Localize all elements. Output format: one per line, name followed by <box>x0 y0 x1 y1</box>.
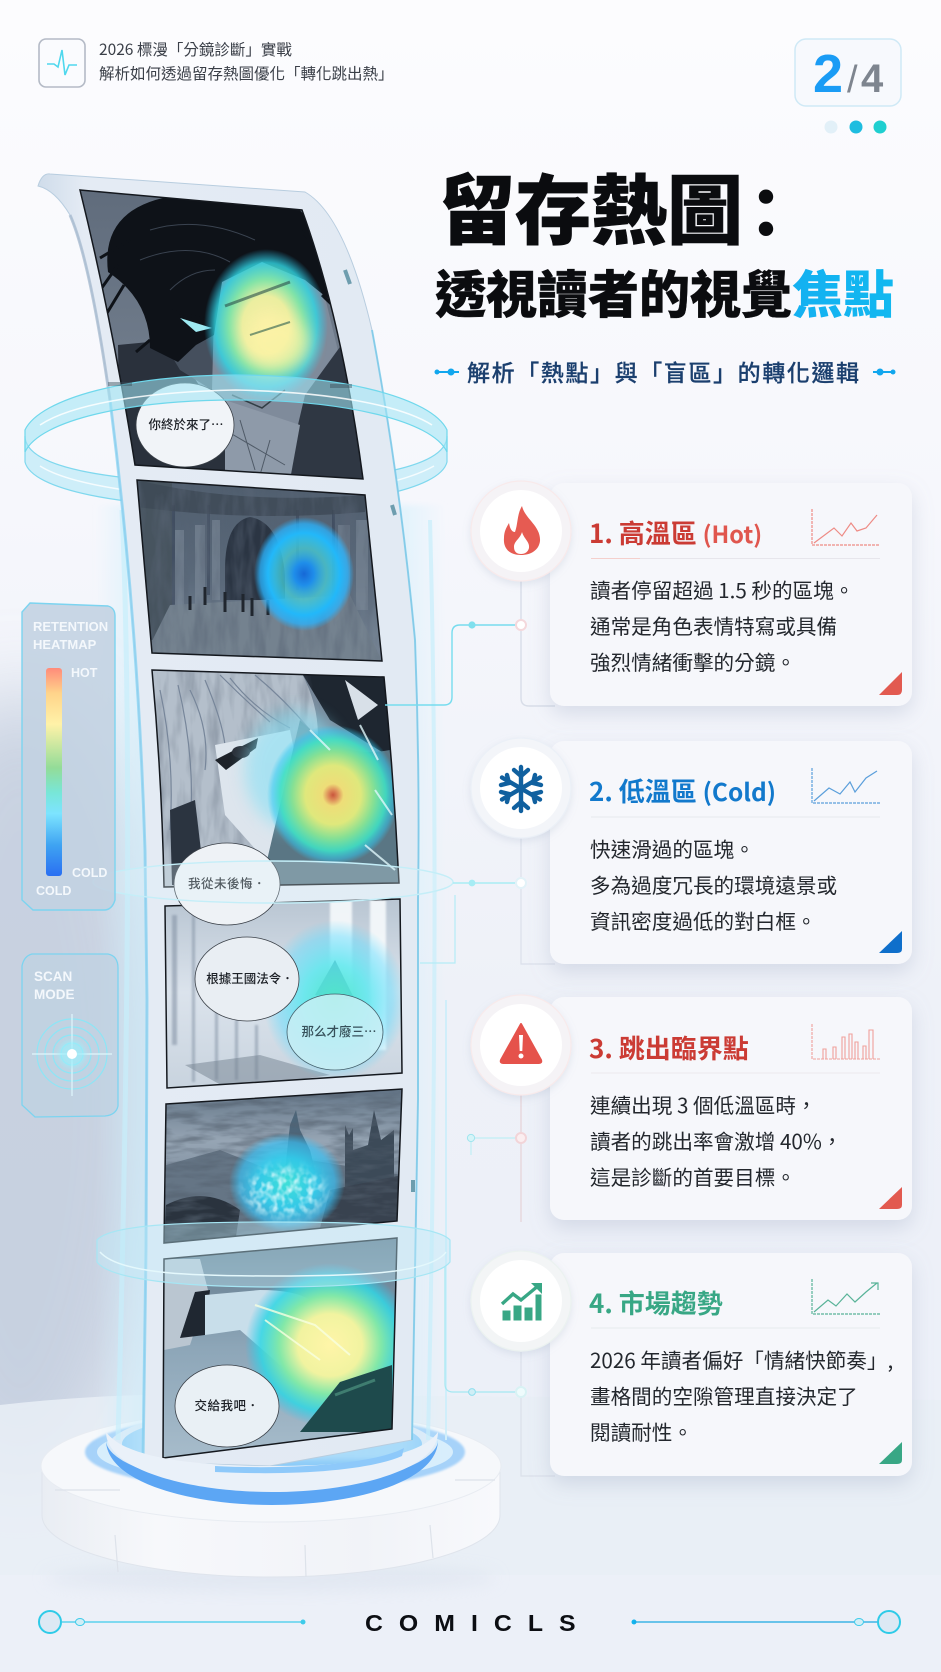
footer left decoration <box>39 1611 306 1633</box>
page dots <box>824 120 886 134</box>
icon: growth chart <box>471 1251 571 1351</box>
panel 5 border <box>164 1089 402 1243</box>
connector: card 3 <box>467 1095 526 1222</box>
icon: warning triangle <box>471 995 571 1095</box>
panel 4: pale waterfall with two bubbles <box>160 895 407 1090</box>
card 1: hot zone: 1. 高溫區 (Hot) <box>589 514 762 551</box>
page badge 2/4: 2 <box>813 44 843 104</box>
header text: 解析如何透過留存熱圖優化「轉化跳出熱」 <box>99 62 394 84</box>
HUD panel: retention heatmap legend: HEATMAP <box>33 637 97 652</box>
card 3: exit threshold: 這是診斷的首要目標。 <box>590 1161 796 1191</box>
sparkline <box>812 768 880 803</box>
card 2: cold zone: 多為過度冗長的環境遠景或 <box>590 869 837 899</box>
card 2: cold zone: 資訊密度過低的對白框。 <box>590 905 817 935</box>
card 1: hot zone: 讀者停留超過 1.5 秒的區塊。 <box>590 574 854 604</box>
card 3: exit threshold: 3. 跳出臨界點 <box>589 1029 749 1066</box>
card 3: exit threshold <box>471 995 912 1220</box>
bar sparkline <box>812 1024 880 1059</box>
ring 3 <box>97 1222 450 1287</box>
footer right decoration <box>632 1611 900 1633</box>
card 4: market trend <box>471 1251 912 1476</box>
HUD panel: retention heatmap legend <box>22 603 115 910</box>
speech bubble 3: 根據王國法令． <box>206 968 294 987</box>
title: 留存熱圖 <box>439 150 743 260</box>
hologram column <box>96 505 446 1460</box>
ring 2 <box>93 861 453 903</box>
card 2: cold zone: 快速滑過的區塊。 <box>590 833 755 863</box>
comic strip paper <box>38 174 419 1466</box>
pedestal base <box>41 1407 501 1592</box>
title: 透視讀者的視覺焦點 <box>435 254 894 328</box>
ring 1 front arc <box>25 375 447 452</box>
page badge 2/4 <box>795 39 901 106</box>
connector: card 4 <box>445 1266 555 1476</box>
card 4: market trend: 4. 市場趨勢 <box>589 1284 723 1321</box>
card 1: hot zone <box>471 481 912 706</box>
HUD panel: scan mode radar: SCAN <box>34 969 72 984</box>
card 4: market trend: 畫格間的空隙管理直接決定了 <box>590 1380 858 1410</box>
panel 3 border <box>152 670 399 887</box>
speech bubble 1: 你終於來了… <box>148 414 224 433</box>
page badge 2/4: / <box>847 59 858 101</box>
speech bubble 5 <box>175 1365 279 1447</box>
panel 2 border <box>137 480 382 661</box>
card 2: cold zone: 2. 低溫區 (Cold) <box>589 772 776 809</box>
page badge 2/4: 4 <box>861 57 884 101</box>
speech bubble 2: 我從未後悔． <box>188 873 266 892</box>
card 4: market trend: 閱讀耐性。 <box>590 1416 693 1446</box>
speech bubble 1 <box>136 383 234 467</box>
card 2: cold zone <box>471 738 912 964</box>
panel 6: reaching hand with warm heat <box>164 1238 396 1458</box>
panel 6 border <box>163 1238 397 1458</box>
header text <box>99 38 394 84</box>
card 4: market trend: 2026 年讀者偏好「情緒快節奏」, <box>590 1344 893 1374</box>
card 1: hot zone: 通常是角色表情特寫或具備 <box>590 610 837 640</box>
title <box>435 150 894 328</box>
HUD panel: retention heatmap legend: HOT <box>71 666 98 680</box>
speech bubble 2 <box>174 843 280 925</box>
card 3: exit threshold: 連續出現 3 個低溫區時， <box>590 1089 817 1119</box>
HUD panel: retention heatmap legend: COLD <box>72 866 107 880</box>
speech bubble 3 <box>195 937 299 1021</box>
speech bubble 5: 交給我吧． <box>194 1395 260 1414</box>
HUD panel: scan mode radar <box>22 954 118 1117</box>
panel 1 border <box>80 190 363 479</box>
sparkline <box>812 509 880 545</box>
speech bubble 4 <box>287 994 383 1070</box>
ring 1 back arc <box>25 436 447 507</box>
pedestal front ring <box>106 1432 438 1505</box>
header icon: pulse logo <box>39 39 85 87</box>
brand wordmark: COMICLS <box>365 1611 576 1637</box>
panel 4 border <box>165 899 402 1088</box>
card 1: hot zone: 強烈情緒衝擊的分鏡。 <box>590 646 796 676</box>
title: ： <box>732 159 800 258</box>
icon: flame <box>471 481 571 581</box>
header text: 2026 標漫「分鏡診斷」實戰 <box>99 38 292 60</box>
sparkline <box>812 1279 880 1314</box>
panel 3: pale-haired figure with hot spot <box>150 665 400 890</box>
speech bubble 4: 那么才廢三… <box>301 1021 377 1040</box>
HUD panel: retention heatmap legend: COLD <box>36 884 71 898</box>
HUD panel: retention heatmap legend: RETENTION <box>33 619 108 634</box>
panel 5: ruined city landscape <box>160 1085 405 1245</box>
connector: card 1 <box>385 580 555 706</box>
icon: snowflake <box>471 738 571 838</box>
panel 2: hall with cold heat <box>138 480 382 660</box>
subtitle: 解析「熱點」與「盲區」的轉化邏輯 <box>467 354 861 388</box>
card 3: exit threshold: 讀者的跳出率會激增 40%， <box>590 1125 842 1155</box>
HUD panel: scan mode radar: MODE <box>34 987 74 1002</box>
panel 1: close-up face with heat <box>81 190 362 478</box>
connector: card 2 <box>420 838 555 964</box>
